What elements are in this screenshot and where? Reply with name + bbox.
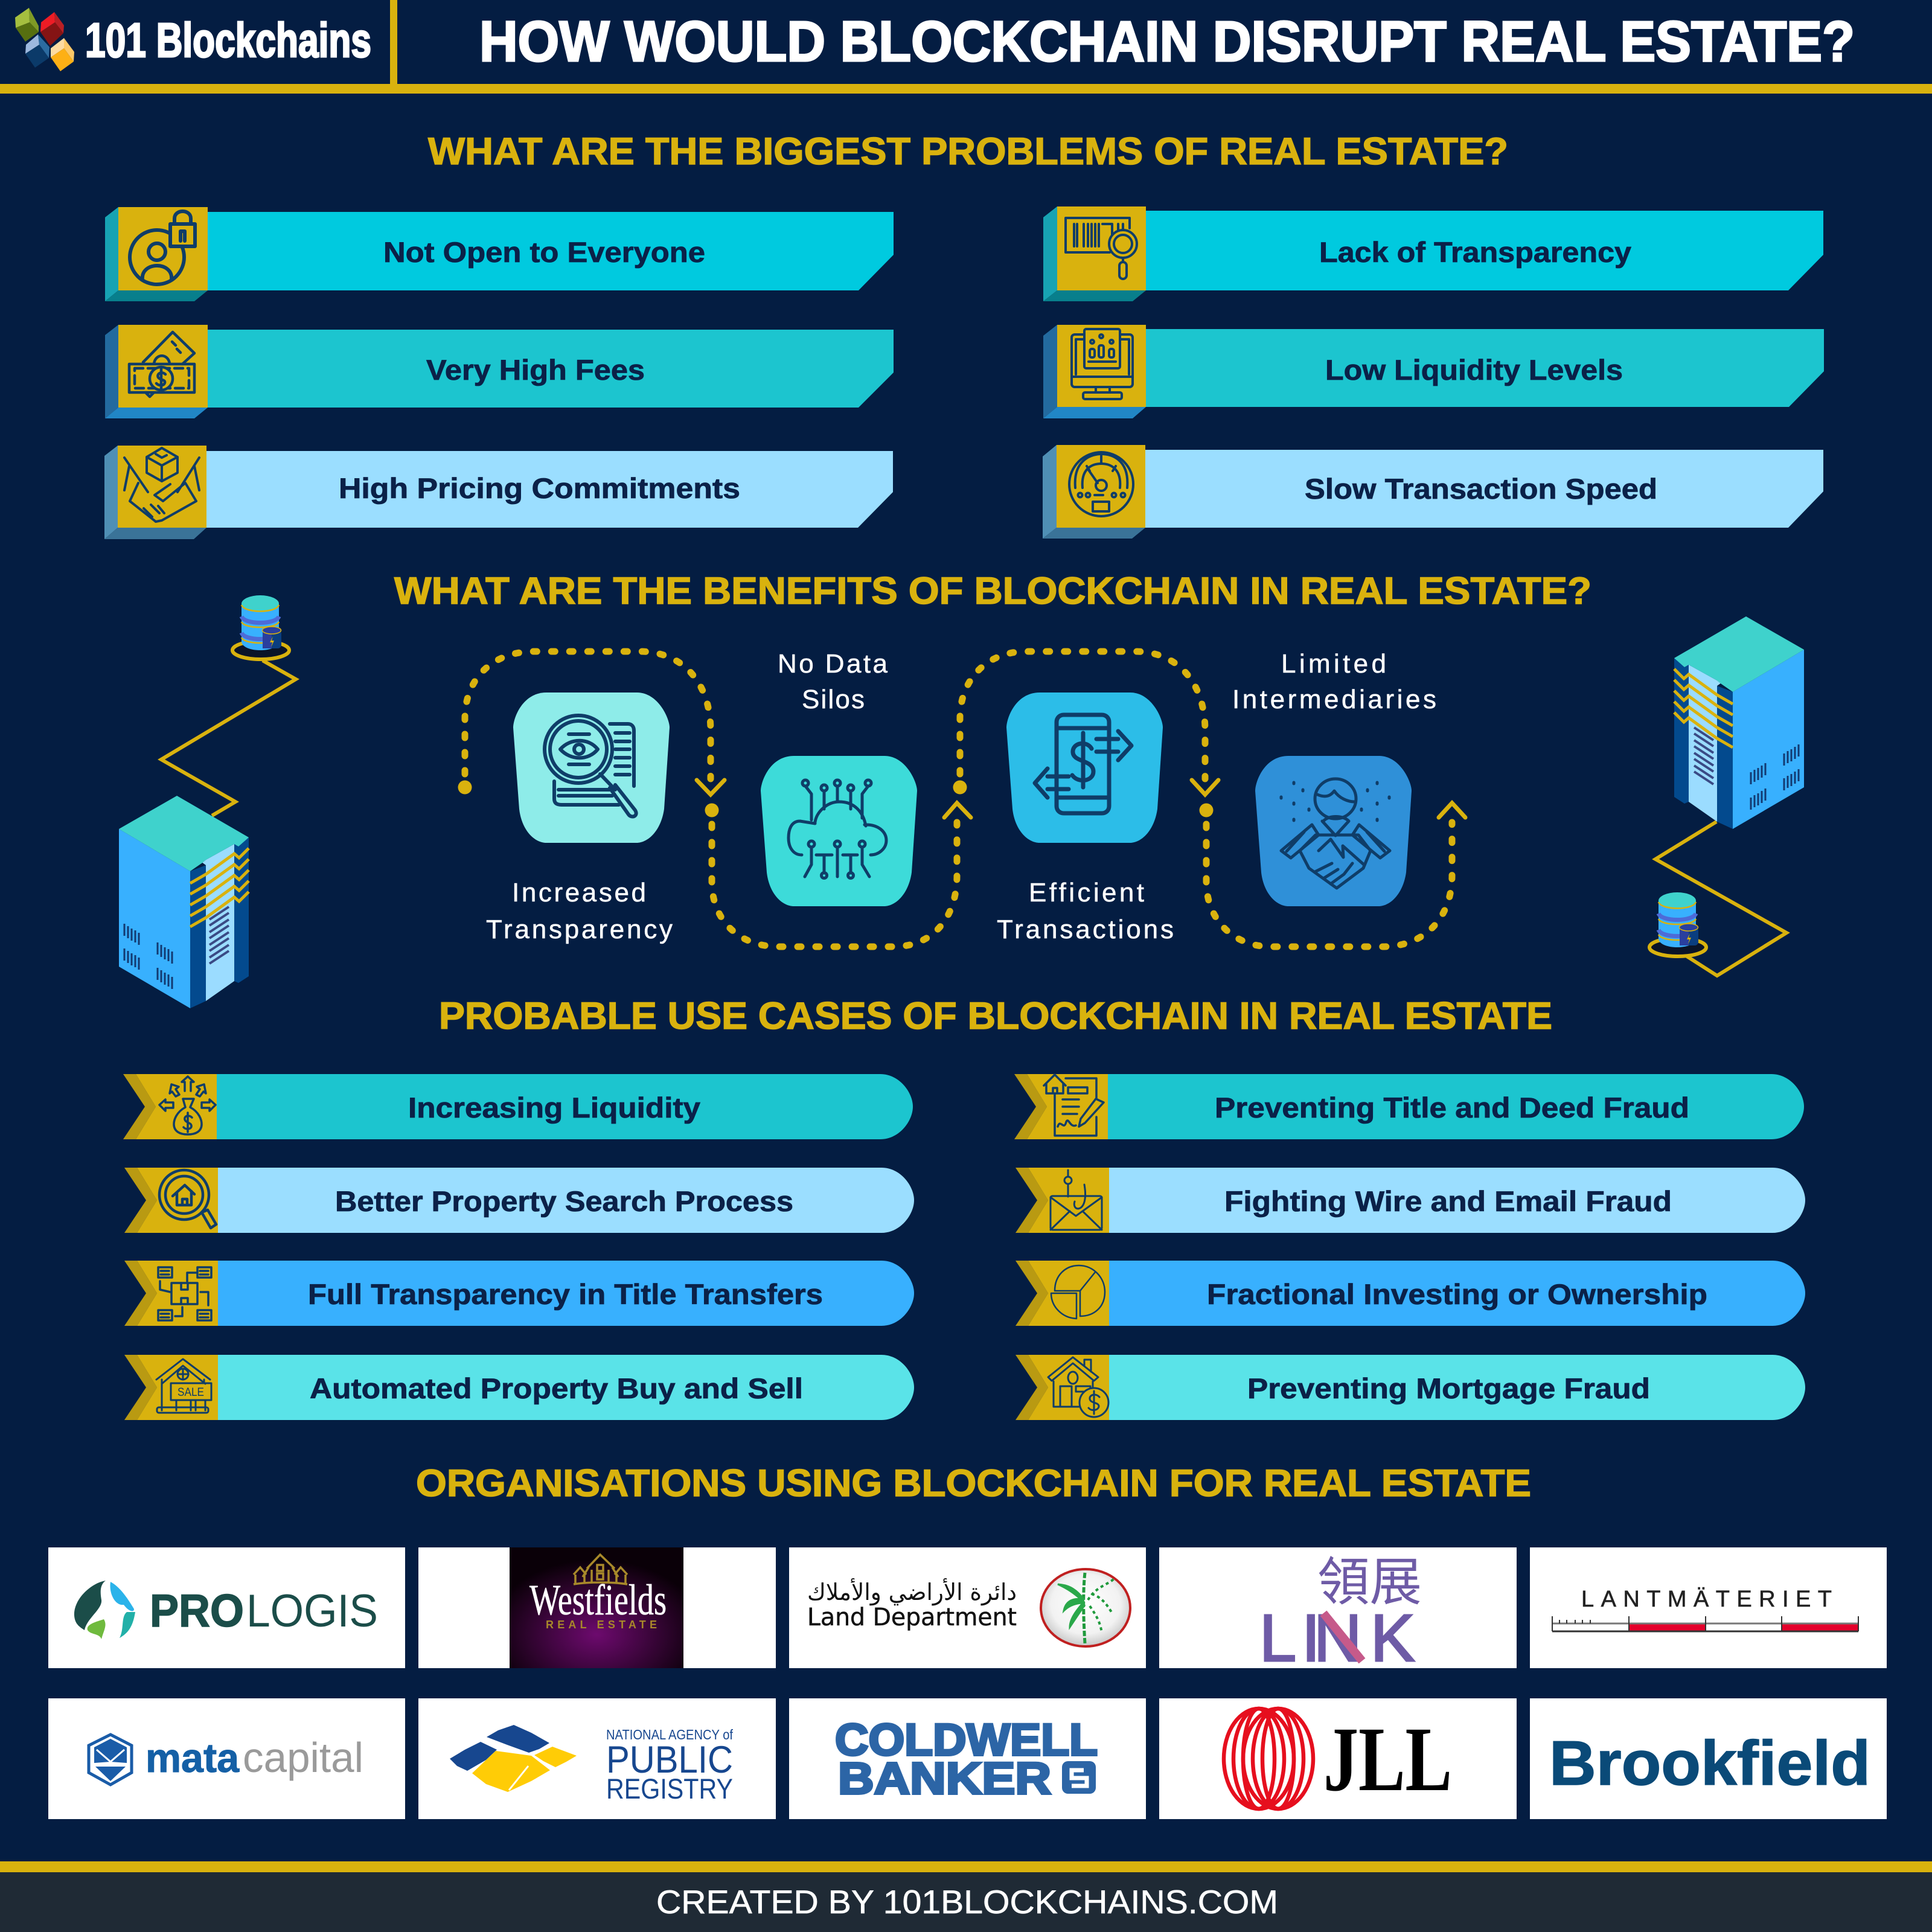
dashed connector 1 (458, 651, 724, 795)
land department arabic name: دائرة الأراضي والأملاك (807, 1578, 1017, 1606)
land department emblem (1041, 1569, 1130, 1646)
logo card: link (1159, 1547, 1517, 1675)
logo card: prologis (48, 1547, 405, 1668)
database cylinder (232, 595, 289, 659)
icon: cloud circuit (788, 780, 886, 878)
benefit: increased transparency (486, 693, 673, 944)
mata wordmark: mata (146, 1735, 240, 1781)
panel: benefits flow (458, 649, 1465, 947)
problem: very high fees (105, 325, 894, 418)
label: No Data (778, 649, 888, 679)
use case: automated buy and sell (124, 1355, 914, 1420)
main title: HOW WOULD BLOCKCHAIN DISRUPT REAL ESTATE? (479, 10, 1855, 74)
prologis mark (74, 1581, 135, 1639)
use case: title and deed fraud (1014, 1074, 1804, 1139)
icon: person with lock (130, 211, 195, 284)
header divider (390, 0, 397, 85)
benefit: limited intermediaries (1232, 649, 1436, 906)
label: Fractional Investing or Ownership (1207, 1278, 1707, 1310)
icon: person and handshake (1281, 779, 1390, 888)
panel: use cases (123, 1074, 1805, 1420)
connector line (161, 661, 296, 816)
land department english name: Land Department (807, 1604, 1017, 1631)
illustration: left server tower (119, 595, 296, 1008)
icon: speedometer (1069, 452, 1133, 516)
icon: banknotes (129, 332, 194, 397)
logo card: public registry: REGISTRY (606, 1773, 733, 1805)
label: Efficient (1029, 878, 1144, 907)
label: High Pricing Commitments (339, 472, 740, 504)
jll rings (1224, 1709, 1313, 1809)
icon: deed and pen (1044, 1075, 1104, 1136)
logo card: brookfield (1530, 1698, 1887, 1819)
label: Lack of Transparency (1319, 236, 1631, 268)
logo card: westfields (418, 1547, 776, 1668)
logo card: land department (789, 1547, 1146, 1668)
label: Preventing Mortgage Fraud (1247, 1372, 1650, 1404)
icon: pie chart (1051, 1265, 1105, 1319)
lantmateriet wordmark: LANTMÄTERIET (1581, 1587, 1832, 1612)
registry mark (450, 1725, 577, 1792)
icon: handshake with box (124, 448, 199, 522)
icon: monitor with chart (1072, 329, 1133, 399)
jll wordmark: JLL (1323, 1709, 1452, 1811)
logo card: jll (1159, 1698, 1517, 1819)
label: Better Property Search Process (335, 1185, 793, 1217)
coldwell wordmark: COLDWELL (835, 1715, 1098, 1765)
logo card: coldwell banker (789, 1698, 1146, 1819)
heading: use cases: PROBABLE USE CASES OF BLOCKCHAIN IN REAL ESTATE (439, 995, 1552, 1037)
logo card: westfields: REAL ESTATE (546, 1619, 657, 1631)
footer gold rule (0, 1861, 1932, 1872)
westfields wordmark: Westfields (529, 1576, 667, 1624)
coldwell mark (1062, 1761, 1096, 1794)
illustration: right server tower (1649, 616, 1804, 976)
label: Not Open to Everyone (383, 236, 705, 268)
label: Slow Transaction Speed (1305, 473, 1657, 505)
logo cubes (15, 8, 74, 71)
icon: house magnifier (159, 1170, 216, 1228)
use case: increasing liquidity (123, 1074, 913, 1139)
label: Preventing Title and Deed Fraud (1215, 1092, 1689, 1124)
logo card: public registry (418, 1698, 776, 1819)
use case: mortgage fraud (1016, 1355, 1805, 1420)
benefit: efficient transactions (997, 693, 1174, 944)
icon: money bag with arrows (159, 1076, 216, 1134)
scale bar (1552, 1616, 1858, 1631)
benefit: efficient transactions: Transactions (997, 915, 1174, 944)
benefit: no data silos: Silos (802, 685, 865, 714)
footer credit: CREATED BY 101BLOCKCHAINS.COM (656, 1883, 1278, 1921)
icon: house for sale (156, 1359, 211, 1413)
link wordmark: LINK (1259, 1601, 1415, 1675)
registry text: NATIONAL AGENCY of (606, 1727, 734, 1742)
prologis wordmark: PRO (150, 1585, 244, 1637)
label: Increasing Liquidity (408, 1092, 700, 1124)
building (1674, 616, 1804, 829)
label: Full Transparency in Title Transfers (308, 1278, 823, 1310)
logo wordmark: 101 Blockchains (85, 13, 371, 67)
header gold rule (0, 84, 1932, 94)
dashed connector 4 (1199, 803, 1465, 947)
label: Low Liquidity Levels (1325, 354, 1623, 386)
icon: phone with money transfer (1035, 715, 1131, 813)
problem: low liquidity levels (1043, 325, 1824, 418)
link chinese name: 領展 (1317, 1553, 1422, 1611)
heading: benefits: WHAT ARE THE BENEFITS OF BLOCKCHAIN IN REAL ESTATE? (394, 570, 1591, 612)
logo card: lantmateriet (1530, 1547, 1887, 1668)
header (0, 0, 1932, 94)
heading: organisations: ORGANISATIONS USING BLOCKCHAIN FOR REAL ESTATE (416, 1462, 1531, 1505)
panel: problems (104, 206, 1824, 539)
footer (0, 1861, 1932, 1932)
use case: better property search (124, 1168, 914, 1233)
panel: organisation logos (48, 1547, 1887, 1819)
use case: wire and email fraud (1016, 1168, 1805, 1233)
logo card: public registry: PUBLIC (606, 1739, 733, 1781)
logo card: mata capital (48, 1698, 405, 1819)
brookfield wordmark: Brookfield (1549, 1729, 1870, 1799)
footer band (0, 1872, 1932, 1932)
problem: high pricing commitments (104, 446, 893, 539)
logo card: mata capital: capital (243, 1734, 363, 1781)
icon: property network (158, 1267, 211, 1320)
dashed connector 2 (705, 803, 971, 947)
building (119, 796, 249, 1008)
label: Very High Fees (426, 354, 645, 386)
label: Limited (1281, 649, 1386, 679)
link pink stroke (1323, 1613, 1362, 1661)
heading: problems: WHAT ARE THE BIGGEST PROBLEMS OF REAL ESTATE? (428, 130, 1508, 173)
icon: phishing envelope (1051, 1170, 1102, 1230)
problem: slow transaction speed (1043, 445, 1823, 539)
dashed connector 3 (953, 651, 1218, 795)
connector line (1655, 822, 1786, 976)
use case: title transfers (124, 1261, 914, 1326)
mata mark (89, 1735, 132, 1785)
label: Increased (512, 878, 646, 907)
westfields house mark (574, 1555, 627, 1584)
benefit: limited intermediaries: Intermediaries (1232, 685, 1436, 714)
benefit: increased transparency: Transparency (486, 915, 673, 944)
label: Automated Property Buy and Sell (310, 1372, 803, 1404)
icon: barcode search (1066, 218, 1137, 279)
icon: house and coin (1048, 1357, 1108, 1417)
problem: not open to everyone (105, 207, 894, 301)
problem: lack of transparency (1043, 206, 1823, 301)
logo card: coldwell banker: BANKER (838, 1753, 1051, 1803)
use case: fractional investing (1016, 1261, 1805, 1326)
logo card: prologis: LOGIS (246, 1585, 378, 1637)
icon: magnifier with eye (545, 715, 636, 817)
database cylinder (1649, 892, 1706, 956)
benefit: no data silos (761, 649, 917, 906)
label: Fighting Wire and Email Fraud (1224, 1185, 1672, 1217)
icon label: SALE (178, 1386, 204, 1399)
